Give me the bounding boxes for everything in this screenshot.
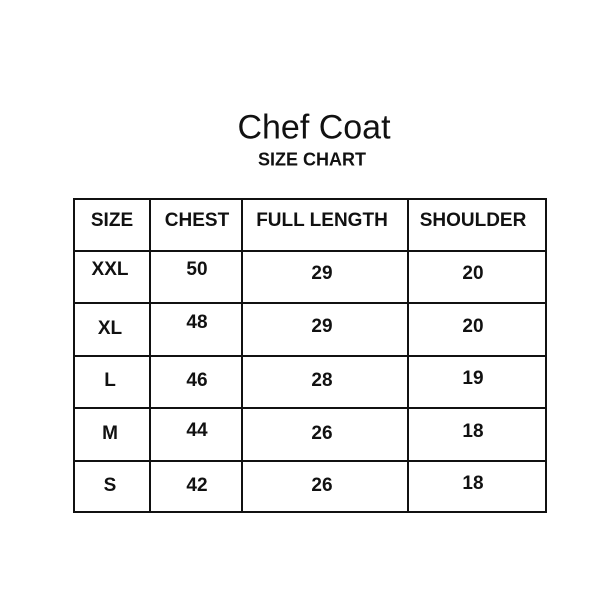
row S — [104, 473, 484, 496]
size table: 50 — [186, 259, 208, 280]
header row: SHOULDER — [420, 210, 526, 231]
header row: CHEST — [165, 210, 229, 231]
size table: XL — [98, 318, 122, 339]
size table: S — [104, 475, 116, 496]
size table: 18 — [462, 421, 484, 442]
size table: 20 — [462, 316, 484, 337]
header row — [91, 210, 526, 231]
row L — [104, 368, 484, 391]
header row: FULL LENGTH — [256, 210, 388, 231]
size table: 19 — [462, 368, 484, 389]
size table: 48 — [186, 312, 208, 333]
row XL — [98, 312, 484, 339]
size table: 26 — [311, 475, 333, 496]
subtitle: SIZE CHART — [258, 150, 366, 170]
row M — [102, 420, 484, 444]
size table: 29 — [311, 316, 333, 337]
title: Chef Coat — [237, 108, 391, 146]
size table: 29 — [311, 263, 333, 284]
size table: 42 — [186, 475, 208, 496]
size table: 46 — [186, 370, 208, 391]
size table: 26 — [311, 423, 333, 444]
size table: XXL — [92, 259, 128, 280]
size table: 18 — [462, 473, 484, 494]
row XXL — [92, 259, 484, 284]
header row: SIZE — [91, 210, 133, 231]
size table: 20 — [462, 263, 484, 284]
size table: 28 — [311, 370, 333, 391]
size table: 44 — [186, 420, 208, 441]
size table: L — [104, 370, 116, 391]
size table: M — [102, 423, 118, 444]
